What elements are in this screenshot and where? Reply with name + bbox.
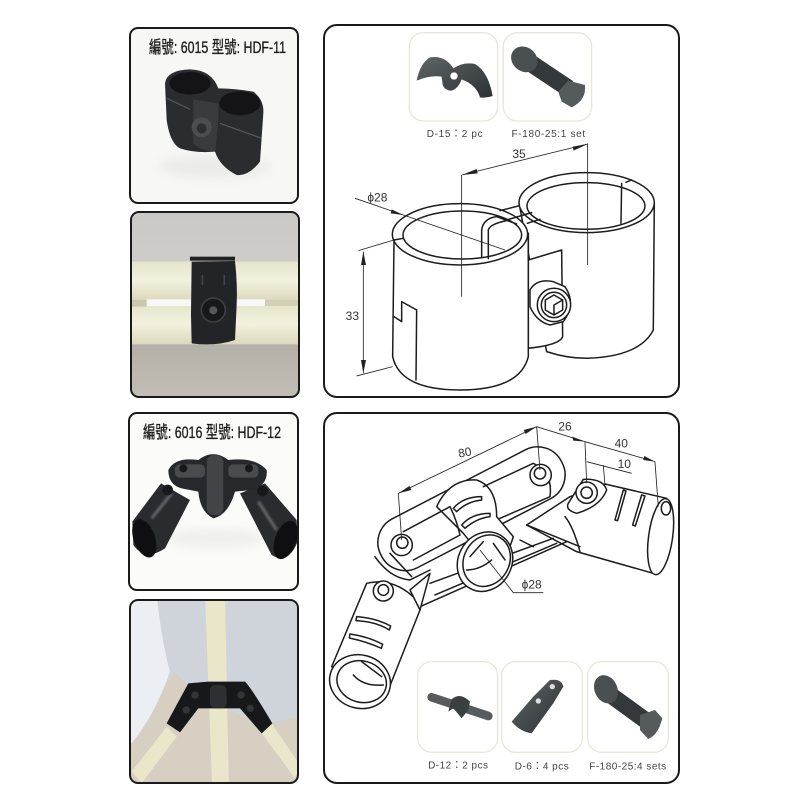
- panel: 6015 technical drawing: [324, 25, 679, 397]
- icon: black hinged joint photo: [127, 454, 303, 562]
- dimension: diameter 28: ϕ28: [367, 190, 388, 204]
- lower linkage bars: [420, 538, 567, 607]
- icon: pipes and clamp photo: [132, 213, 298, 396]
- part label: D-12：2 pcs: [428, 761, 489, 772]
- dimension: 10: [587, 457, 632, 485]
- icon: tripod pipes and joint photo: [131, 601, 297, 782]
- icon: black double clamp photo: [165, 69, 264, 176]
- heading: 6015: 編號: 6015 型號: HDF-11: [149, 38, 286, 57]
- part thumbnail: F-180-25 bolt: [588, 662, 668, 752]
- part thumbnail: F-180-25 bolt: [503, 33, 592, 121]
- dimension: 10: 10: [618, 457, 631, 471]
- part label: F-180-25:1 set: [512, 129, 586, 140]
- icon: hex socket bolt: [530, 281, 571, 325]
- part label: D-6：4 pcs: [515, 761, 569, 772]
- panel: photo of 6016 joint on tripod: [129, 599, 299, 784]
- dimension: 35: 35: [512, 147, 526, 161]
- dimension: 80: 80: [457, 444, 473, 461]
- dimension: 40: 40: [615, 436, 628, 450]
- drawing: double pipe clamp: [392, 173, 654, 390]
- part thumbnail: D-15: [409, 33, 498, 121]
- dimension: 26: [537, 420, 587, 483]
- dimension: diameter 28: ϕ28: [522, 577, 542, 591]
- part thumbnail: D-12: [418, 662, 498, 752]
- dimension: 33: 33: [346, 309, 359, 323]
- drawing: hinged joint: [323, 438, 678, 715]
- dimension: 33: [346, 240, 394, 376]
- dimension: diameter 28: [355, 190, 505, 250]
- dimension: 40: [585, 436, 658, 507]
- lower pipe ring: [447, 522, 523, 602]
- left tube: [323, 573, 430, 715]
- panel: photo of 6016 joint: [127, 413, 303, 590]
- dimension: 35: [462, 143, 588, 297]
- dimension: 26: 26: [558, 420, 572, 434]
- part thumbnail: D-6: [502, 662, 582, 752]
- right tube: [527, 479, 678, 576]
- panel: photo of 6015 clamp on pipes: [130, 211, 300, 398]
- part label: D-15：2 pc: [427, 129, 483, 140]
- part label: F-180-25:4 sets: [589, 761, 667, 772]
- panel: 6016 technical drawing: [323, 413, 679, 783]
- panel: photo of 6015 clamp: [130, 28, 298, 203]
- dimension: diameter 28: [480, 550, 543, 593]
- dimension: 80: [398, 427, 540, 540]
- upper long plate: [369, 438, 574, 580]
- heading: 6016: 編號: 6016 型號: HDF-12: [143, 423, 281, 442]
